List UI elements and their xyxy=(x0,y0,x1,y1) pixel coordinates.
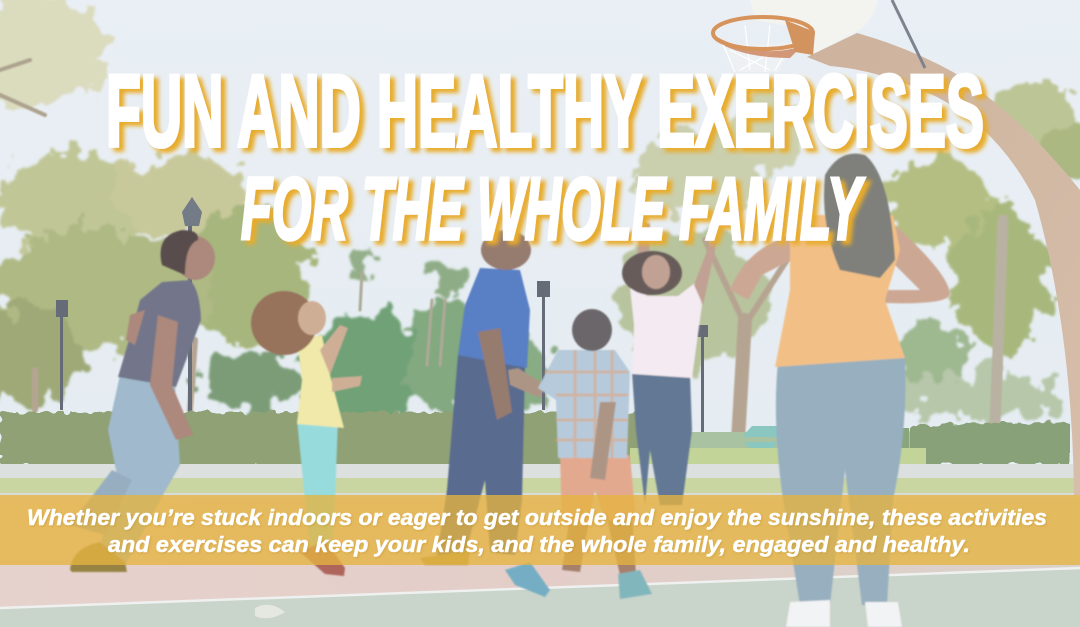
lamp posts xyxy=(56,197,708,445)
person: man in blue shirt xyxy=(420,230,531,565)
lawn and path xyxy=(630,448,926,465)
hedges xyxy=(0,412,640,466)
sky xyxy=(0,0,1080,430)
tree trunks xyxy=(0,60,1003,440)
backboard xyxy=(750,0,878,53)
person: boy in plaid shirt xyxy=(505,309,652,599)
trees xyxy=(0,0,1080,417)
pole support rod xyxy=(892,0,925,68)
title xyxy=(106,54,984,258)
bench xyxy=(742,426,780,460)
caption text: Whether you’re stuck indoors or eager to get outside and enjoy the sunshine, these activities xyxy=(27,505,1047,530)
person: girl in yellow dress xyxy=(251,291,362,576)
court xyxy=(0,498,1080,627)
hoop pole xyxy=(807,33,1080,495)
caption text xyxy=(27,505,1047,557)
person: woman in orange top xyxy=(730,154,950,627)
rim and net xyxy=(713,17,815,72)
person: man in grey shirt xyxy=(70,230,215,572)
person: girl in white shirt with raised arms xyxy=(622,222,717,505)
yellow caption band xyxy=(0,495,1080,565)
caption text: and exercises can keep your kids, and the whole family, engaged and healthy. xyxy=(108,532,970,557)
